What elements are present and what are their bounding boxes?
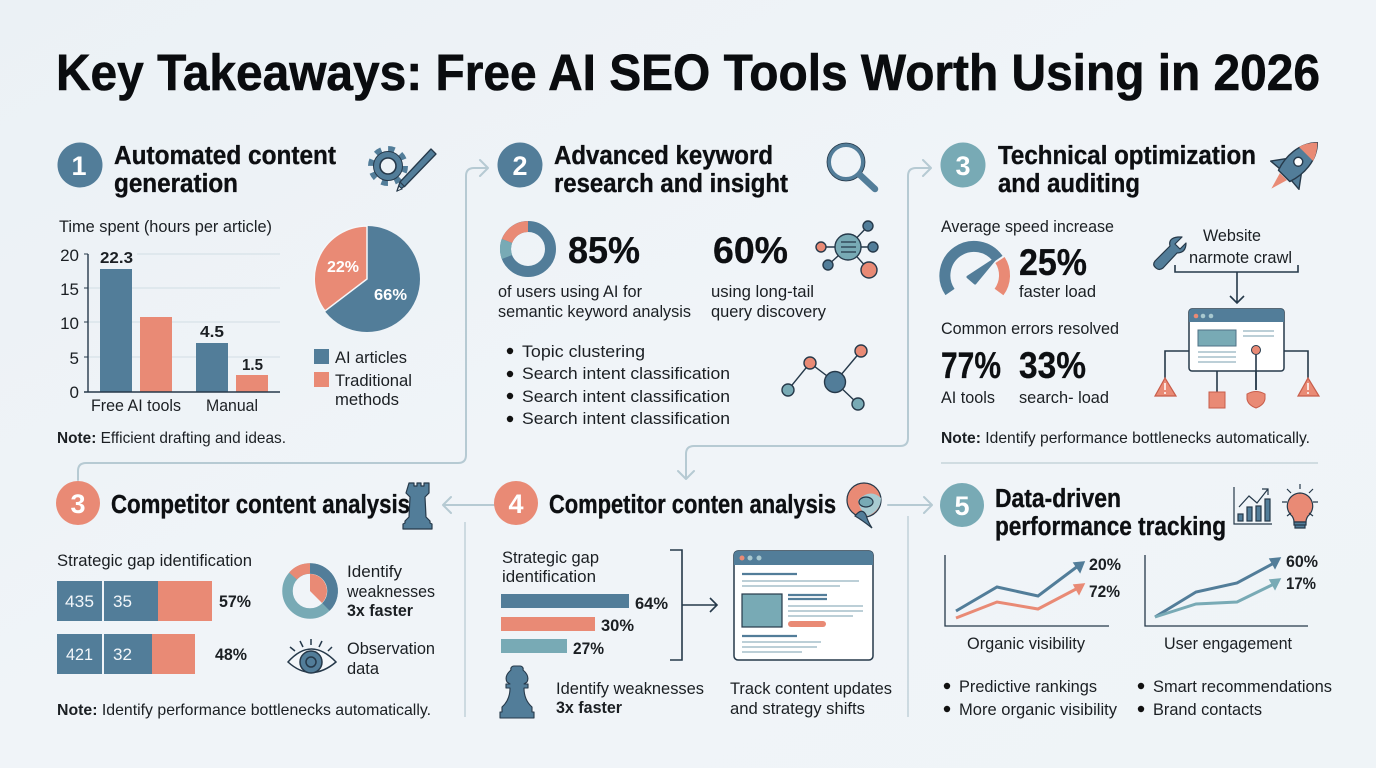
stat: 77% AI tools bbox=[941, 345, 1001, 407]
browser window mockup bbox=[734, 551, 873, 660]
arrow: section 4 to competitor section bbox=[443, 497, 494, 513]
icon: chess bishop bbox=[500, 666, 534, 718]
stat: 25% faster load: faster load bbox=[1019, 282, 1096, 301]
note: Note: Identify performance bottlenecks automatically. bbox=[57, 702, 431, 719]
bar chart: time spent: 20 bbox=[60, 246, 79, 265]
bullet list: left bbox=[944, 677, 1117, 719]
number badge 4: 4 bbox=[508, 489, 524, 519]
stacked bars: 35 bbox=[113, 592, 132, 611]
label: strategic gap identification bbox=[502, 548, 599, 586]
bullet list: right: Brand contacts bbox=[1153, 700, 1262, 719]
heading: data-driven performance tracking: Data-driven bbox=[995, 485, 1121, 513]
bar chart: time spent: 22.3 bbox=[100, 250, 133, 267]
heading: advanced keyword research: research and insight bbox=[554, 170, 788, 198]
line chart: organic visibility: Organic visibility bbox=[967, 634, 1085, 653]
bar chart: time spent: 5 bbox=[70, 349, 79, 368]
bullet list: keyword features: Topic clustering bbox=[522, 342, 645, 361]
panel: automated content generation bbox=[57, 142, 436, 447]
icon: growth chart bbox=[1234, 487, 1272, 524]
line chart: user engagement: 60% bbox=[1286, 552, 1318, 571]
bullet list: keyword features: Search intent classification bbox=[522, 387, 730, 406]
chart label: Time spent (hours per article) bbox=[59, 217, 272, 236]
text: observation data bbox=[347, 639, 435, 678]
bullet list: left: More organic visibility bbox=[959, 700, 1117, 719]
bar chart: gap percentages: 64% bbox=[635, 594, 668, 613]
icon: rocket bbox=[1257, 129, 1331, 203]
text: observation data: Observation bbox=[347, 639, 435, 658]
stacked bars: 421 bbox=[66, 645, 93, 664]
line chart: organic visibility: 20% bbox=[1089, 555, 1121, 574]
note: Note: Efficient drafting and ideas. bbox=[57, 430, 286, 447]
stat: 25% faster load bbox=[1019, 242, 1096, 301]
line chart: organic visibility: 72% bbox=[1089, 582, 1120, 601]
number badge 2: 2 bbox=[512, 151, 528, 181]
text: identify weaknesses: weaknesses bbox=[346, 582, 435, 601]
text: semantic keyword analysis: of users using AI for bbox=[498, 282, 642, 301]
text: long-tail query: using long-tail bbox=[711, 282, 814, 301]
panel: competitor content analysis (left) bbox=[56, 481, 435, 719]
heading: automated content generation: generation bbox=[114, 170, 238, 198]
bar chart: gap percentages: 27% bbox=[573, 639, 604, 658]
heading: competitor conten analysis: Competitor conten analysis bbox=[549, 491, 836, 519]
bar chart: time spent: 4.5 bbox=[200, 324, 224, 341]
bar chart: gap percentages: 30% bbox=[601, 616, 634, 635]
bullet list: keyword features bbox=[507, 342, 730, 428]
bar chart: time spent: 0 bbox=[70, 383, 79, 402]
stacked bars: 57% bbox=[219, 592, 251, 611]
text: identify weaknesses: Identify weaknesses bbox=[556, 679, 704, 698]
bar chart: time spent: 10 bbox=[60, 314, 79, 333]
bar chart: time spent: Manual bbox=[206, 396, 258, 415]
text: identify weaknesses: 3x faster bbox=[556, 698, 622, 717]
icon: wrench bbox=[1154, 237, 1186, 270]
bar chart: gap percentages bbox=[501, 594, 668, 658]
bar chart: time spent: 15 bbox=[60, 280, 79, 299]
donut chart: 85% bbox=[506, 226, 550, 272]
number badge 1 bbox=[58, 142, 102, 188]
heading: advanced keyword research: Advanced keyword bbox=[554, 142, 773, 170]
icon: chess rook bbox=[403, 483, 432, 529]
stacked bars: 32 bbox=[113, 645, 132, 664]
heading: technical optimization: and auditing bbox=[998, 170, 1140, 198]
arrow: section 1 to section 2 connector bbox=[78, 160, 488, 480]
number badge 3 coral bbox=[56, 481, 100, 525]
legend bbox=[314, 348, 412, 409]
line chart: user engagement bbox=[1145, 552, 1318, 653]
stacked bars bbox=[57, 581, 251, 674]
stat: 33% search load: search- load bbox=[1019, 388, 1109, 407]
bracket arrow bbox=[670, 550, 717, 660]
bar chart: time spent bbox=[60, 246, 280, 415]
number badge 3: 3 bbox=[955, 151, 971, 181]
bullet list: left: Predictive rankings bbox=[959, 677, 1097, 696]
text: track content updates bbox=[730, 679, 892, 718]
text: identify weaknesses bbox=[556, 679, 704, 717]
panel: data-driven performance tracking bbox=[940, 483, 1332, 719]
icon: gear and pencil bbox=[371, 149, 436, 191]
bar chart: time spent: 1.5 bbox=[242, 357, 263, 374]
number badge 4 bbox=[494, 481, 538, 525]
text: observation data: data bbox=[347, 659, 380, 678]
number badge 5 bbox=[940, 483, 984, 527]
note: Note: Identify performance bottlenecks automatically. bbox=[941, 430, 1310, 447]
number badge 5: 5 bbox=[954, 491, 970, 521]
number badge 2 bbox=[498, 142, 542, 188]
stat: 33% search load bbox=[1019, 345, 1109, 407]
icon: competitor eye bbox=[847, 483, 881, 528]
arrow: section 2 to section 3 and section 4 connector bbox=[678, 160, 931, 479]
line chart: user engagement: User engagement bbox=[1164, 634, 1292, 653]
icon: light bulb bbox=[1282, 484, 1318, 528]
pie chart bbox=[314, 226, 420, 332]
text: semantic keyword analysis bbox=[498, 282, 691, 321]
stat: 60%: 60% bbox=[713, 230, 788, 271]
bullet list: right bbox=[1138, 677, 1332, 719]
stat: 33% search load: 33% bbox=[1019, 345, 1086, 386]
text: long-tail query: query discovery bbox=[711, 302, 826, 321]
text: identify weaknesses: Identify bbox=[347, 562, 402, 581]
bullet list: keyword features: Search intent classification bbox=[522, 409, 730, 428]
pie chart: 22% bbox=[327, 259, 359, 276]
legend: Traditional bbox=[335, 371, 412, 390]
arrow: section 4 to section 5 bbox=[888, 497, 932, 513]
panel: competitor conten analysis (middle) bbox=[494, 481, 892, 718]
bullet list: keyword features: Search intent classification bbox=[522, 364, 730, 383]
heading: technical optimization: Technical optimization bbox=[998, 142, 1256, 170]
text: track content updates: Track content updates bbox=[730, 679, 892, 698]
stacked bars: 48% bbox=[215, 645, 247, 664]
stat: 25% faster load: 25% bbox=[1019, 242, 1087, 283]
panel: advanced keyword research bbox=[498, 142, 878, 428]
heading: competitor content analysis: Competitor content analysis bbox=[111, 491, 410, 519]
icon: magnifying glass bbox=[827, 143, 875, 189]
stacked bars: 435 bbox=[65, 592, 94, 611]
label: website crawl: Website bbox=[1203, 226, 1261, 245]
text: track content updates: and strategy shifts bbox=[730, 699, 865, 718]
donut chart: weaknesses bbox=[288, 568, 333, 614]
text: identify weaknesses: 3x faster bbox=[347, 601, 413, 620]
stat: 77% AI tools: AI tools bbox=[941, 388, 995, 407]
label: strategic gap identification: Strategic gap identification bbox=[57, 551, 252, 570]
pie chart: 66% bbox=[374, 287, 407, 304]
label: website crawl: narmote crawl bbox=[1189, 248, 1292, 267]
stat: 77% AI tools: 77% bbox=[941, 345, 1001, 386]
gauge bbox=[945, 246, 1005, 292]
heading: automated content generation: Automated content bbox=[114, 142, 336, 170]
number badge 3 coral: 3 bbox=[70, 489, 86, 519]
legend: methods bbox=[335, 390, 399, 409]
crawl diagram bbox=[1155, 265, 1319, 408]
label: strategic gap identification: identification bbox=[502, 567, 596, 586]
label: average speed increase: Average speed increase bbox=[941, 217, 1114, 236]
label: common errors resolved: Common errors resolved bbox=[941, 319, 1119, 338]
line chart: organic visibility bbox=[945, 555, 1121, 653]
heading: data-driven performance tracking bbox=[995, 485, 1226, 541]
icon: keyword network bbox=[816, 221, 878, 278]
label: website crawl bbox=[1189, 226, 1292, 267]
title: Key Takeaways: Free AI SEO Tools Worth Using in 2026 bbox=[56, 44, 1320, 101]
number badge 3 bbox=[940, 142, 986, 188]
bullet list: right: Smart recommendations bbox=[1153, 677, 1332, 696]
icon: topic cluster network bbox=[782, 345, 867, 410]
heading: data-driven performance tracking: performance tracking bbox=[995, 513, 1226, 541]
line chart: user engagement: 17% bbox=[1286, 574, 1316, 593]
number badge 1: 1 bbox=[71, 151, 87, 181]
text: identify weaknesses bbox=[346, 562, 435, 620]
label: strategic gap identification: Strategic gap bbox=[502, 548, 599, 567]
heading: advanced keyword research bbox=[554, 142, 788, 198]
icon: eye bbox=[288, 639, 336, 673]
heading: technical optimization bbox=[998, 142, 1256, 198]
stat: 85%: 85% bbox=[568, 230, 640, 271]
bar chart: time spent: Free AI tools bbox=[91, 396, 181, 415]
panel: technical optimization and auditing bbox=[940, 129, 1331, 447]
heading: automated content generation bbox=[114, 142, 336, 198]
legend: AI articles bbox=[335, 348, 407, 367]
text: semantic keyword analysis: semantic keyword analysis bbox=[498, 302, 691, 321]
text: long-tail query bbox=[711, 282, 826, 321]
